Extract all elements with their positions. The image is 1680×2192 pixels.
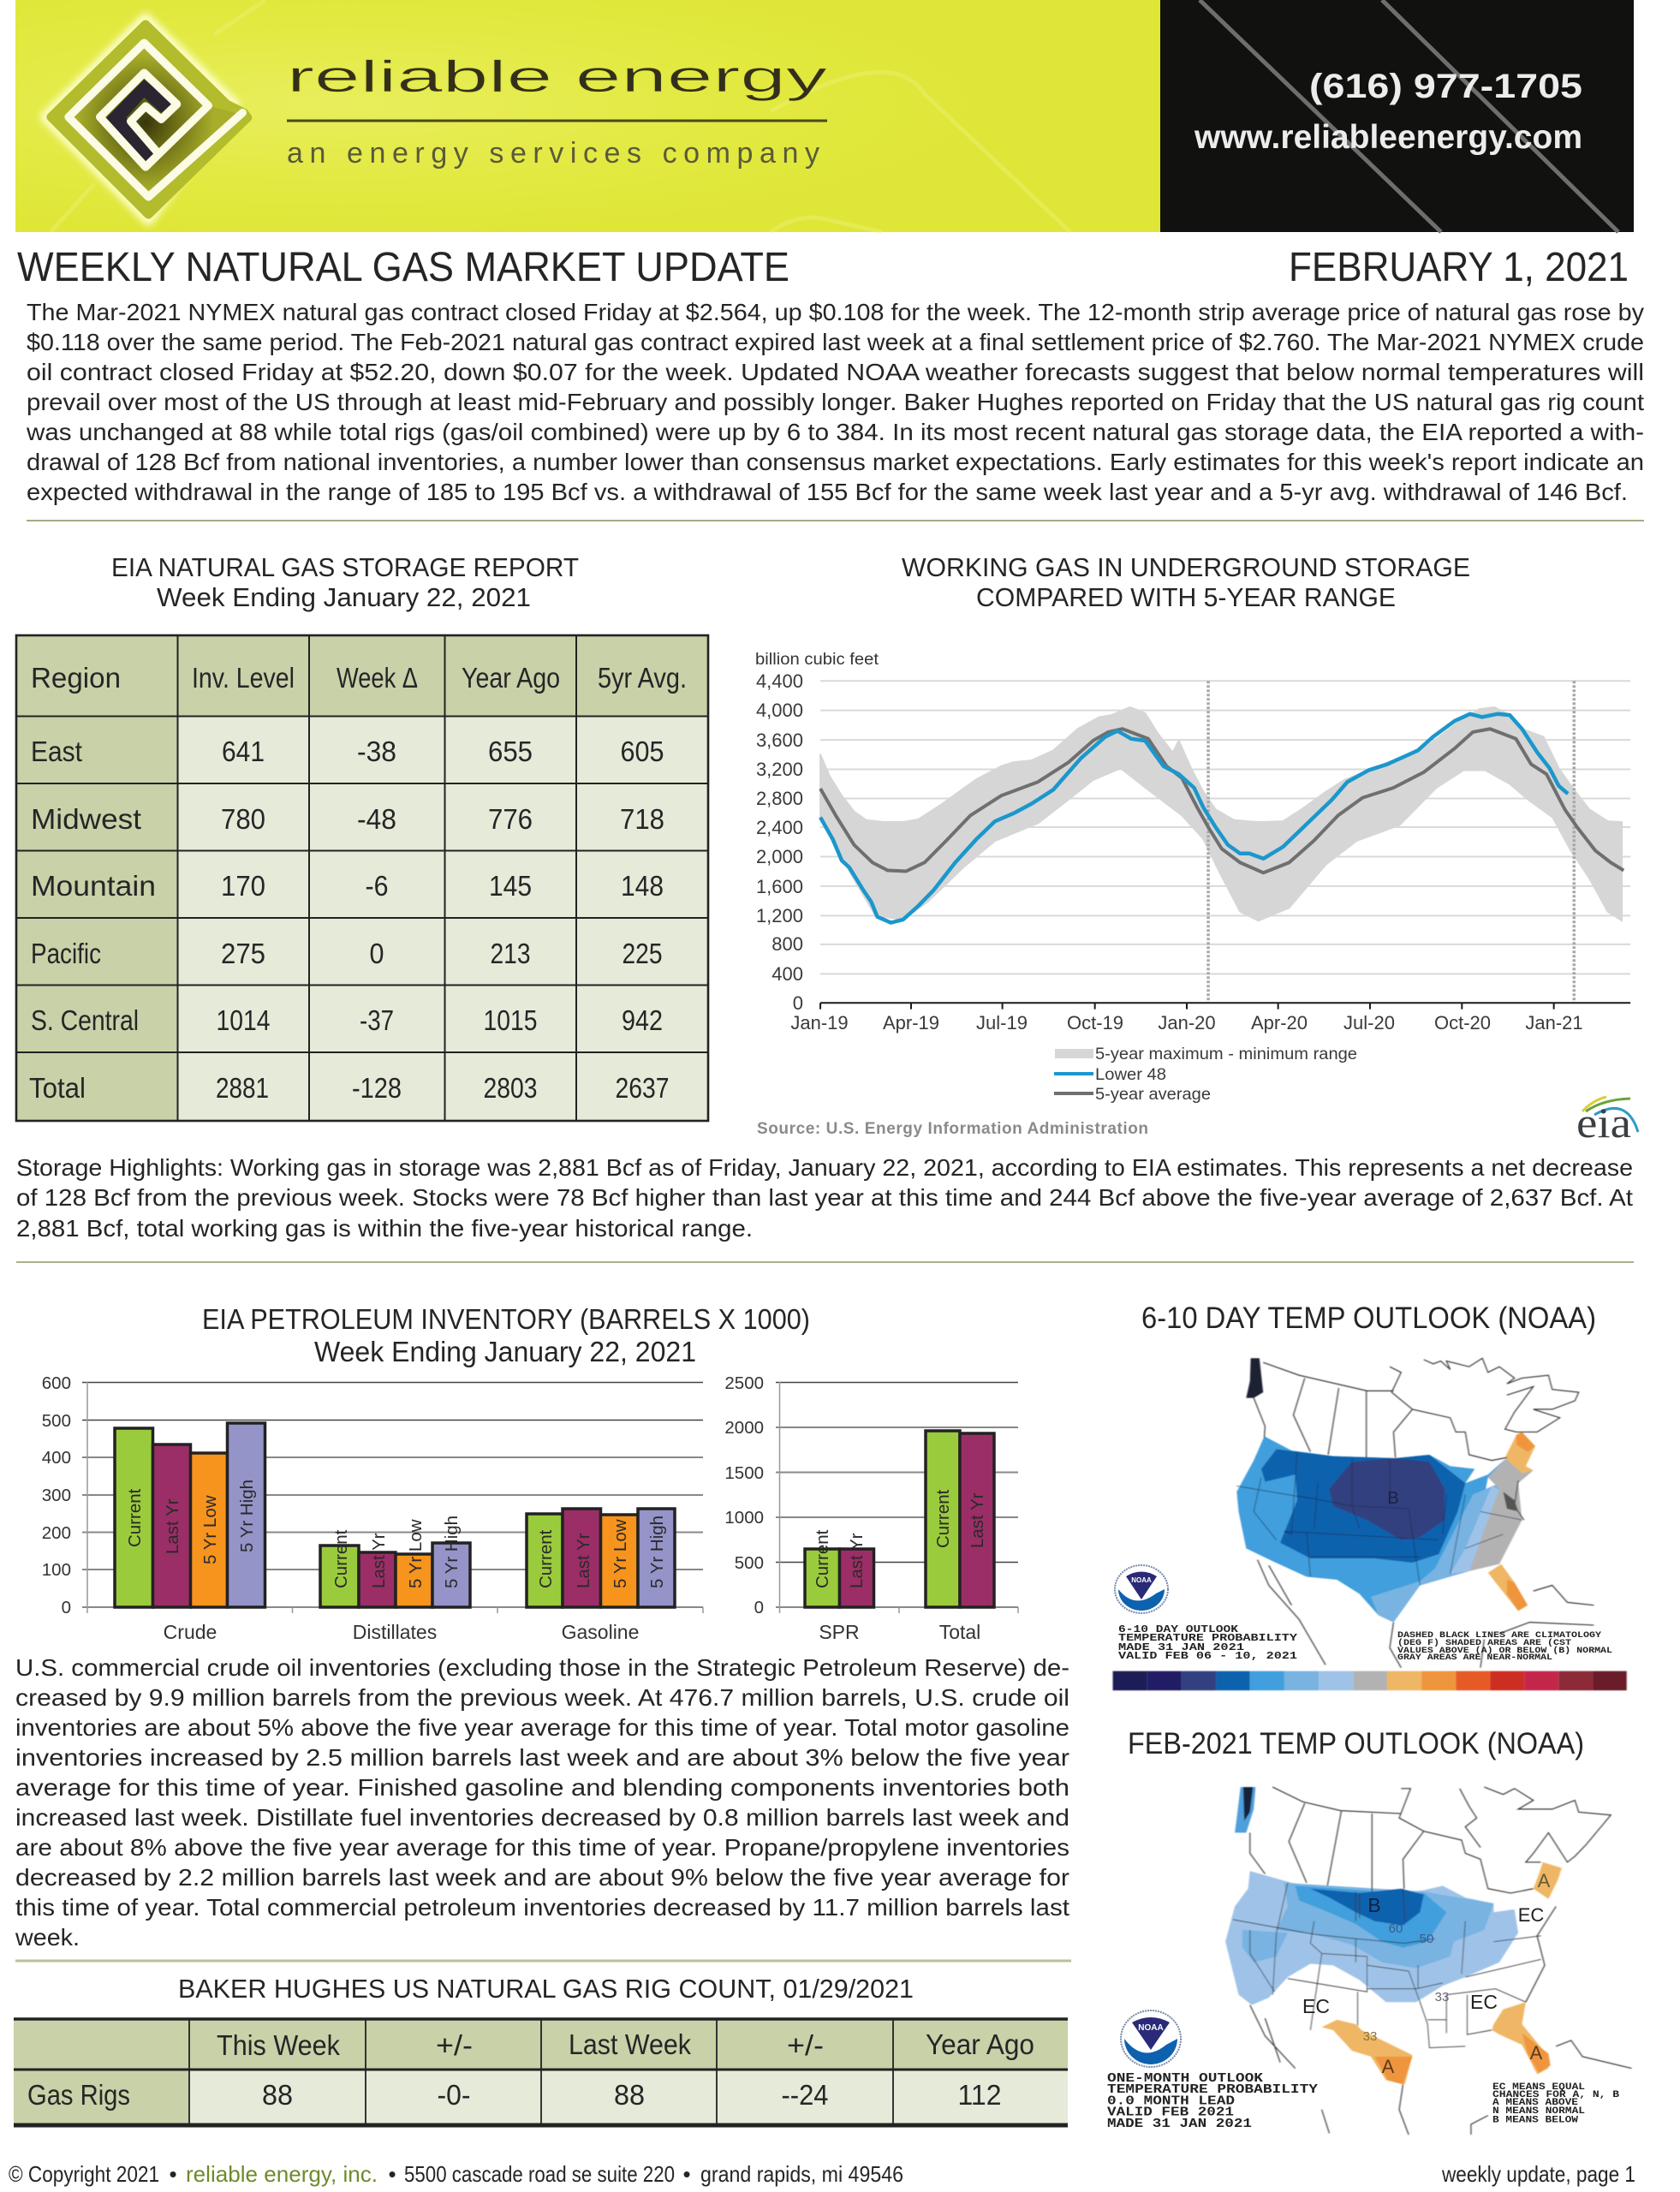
- header row: Last Week: [569, 2028, 691, 2060]
- plotted series: [820, 681, 1630, 1010]
- footer: [9, 2161, 903, 2187]
- 5-year range band: [820, 707, 1622, 920]
- row: Total: 2881: [216, 1072, 269, 1104]
- row: Mountain: -6: [365, 870, 389, 902]
- vertical bar labels: Last Yr: [968, 1492, 987, 1548]
- lime header panel: [15, 0, 1160, 232]
- x axis labels: Jan-21: [1525, 1012, 1583, 1033]
- category labels: [819, 1621, 980, 1643]
- map text: legend notes: B MEANS BELOW: [1492, 2115, 1578, 2125]
- row: Mountain: Mountain: [31, 870, 156, 902]
- x axis labels: Apr-19: [883, 1012, 939, 1033]
- y axis labels: 800: [771, 933, 803, 955]
- y axis labels: 2,400: [756, 817, 803, 838]
- map text: outlook details: MADE 31 JAN 2021: [1107, 2117, 1252, 2131]
- row: East: East: [31, 736, 82, 767]
- heading: 6-10 day outlook: 6-10 DAY TEMP OUTLOOK (NOAA): [1141, 1302, 1596, 1335]
- row: Mountain: 170: [221, 870, 265, 902]
- map text: outlook details: ONE-MONTH OUTLOOK: [1107, 2071, 1263, 2086]
- data row: -0-: [437, 2079, 471, 2111]
- petroleum paragraph: week.: [15, 1924, 80, 1951]
- category labels: Total: [939, 1621, 980, 1643]
- map letters: A: [1382, 2056, 1395, 2077]
- map letters: [1302, 1870, 1551, 2077]
- x axis labels: Jan-19: [790, 1012, 849, 1033]
- x axis labels: Oct-19: [1067, 1012, 1123, 1033]
- row: Total: Total: [29, 1072, 86, 1104]
- header row: +/-: [436, 2029, 473, 2061]
- x axis labels: Jan-20: [1158, 1012, 1216, 1033]
- y axis labels: 300: [42, 1486, 71, 1505]
- y axis labels: 4,400: [756, 670, 803, 692]
- 5-year average line: [820, 729, 1623, 873]
- header banner: [15, 0, 1634, 232]
- row: Pacific: 225: [622, 938, 663, 969]
- table header row: Inv. Level: [192, 662, 295, 694]
- vertical bar labels: Current: [125, 1488, 145, 1547]
- row: East: 655: [488, 736, 533, 767]
- row: Pacific: Pacific: [31, 938, 101, 969]
- map text: outlook details: 6-10 DAY OUTLOOK: [1118, 1623, 1239, 1635]
- row: Pacific: 275: [221, 938, 265, 969]
- category labels: Gasoline: [562, 1621, 639, 1643]
- row: S. Central: 942: [622, 1004, 663, 1036]
- map text: outlook details: VALID FEB 2021: [1107, 2105, 1234, 2120]
- dark blue region: [1261, 1449, 1465, 1563]
- y axis labels: [724, 1373, 764, 1617]
- heading: working gas chart: WORKING GAS IN UNDERGROUND STORAGE: [902, 552, 1470, 582]
- bars: gasoline: [527, 1509, 675, 1607]
- date: FEBRUARY 1, 2021: [1289, 245, 1629, 290]
- table: storage by region: [16, 635, 708, 1121]
- map text: legend notes: EC MEANS EQUAL: [1492, 2082, 1585, 2093]
- y axis labels: 500: [42, 1411, 71, 1431]
- medium blue region: [1277, 1883, 1493, 1969]
- icon: NOAA logo: [1121, 2010, 1181, 2067]
- y axis labels: 2500: [724, 1373, 764, 1393]
- map letters: 60: [1389, 1921, 1403, 1936]
- vertical bar labels: [125, 1480, 667, 1588]
- row: S. Central: S. Central: [31, 1004, 139, 1036]
- petroleum paragraph: U.S. commercial crude oil inventories (excluding those in the Strategic Petroleum Reserve) de-: [15, 1654, 1069, 1681]
- vertical bar labels: Last Yr: [847, 1533, 867, 1588]
- map text: outlook details: TEMPERATURE PROBABILITY: [1107, 2082, 1318, 2097]
- intro paragraph: expected withdrawal in the range of 185 to 195 Bcf vs. a withdrawal of 155 Bcf for the same week last year and a 5-yr avg. withdrawal of 146 Bcf.: [27, 479, 1628, 505]
- x axis labels: Apr-20: [1251, 1012, 1308, 1033]
- icon: eia logo: eia: [1576, 1099, 1631, 1147]
- table: rig count: [14, 2019, 1068, 2125]
- bars: distillates: [320, 1543, 470, 1607]
- footer: •: [388, 2161, 396, 2187]
- storage highlights text: 2,881 Bcf, total working gas is within the five-year historical range.: [16, 1215, 753, 1242]
- table header row: Region: [31, 662, 121, 694]
- row: S. Central: 1014: [216, 1004, 271, 1036]
- state lines: [1233, 1883, 1541, 2048]
- vertical bar labels: [813, 1489, 987, 1588]
- heading: Feb outlook: FEB-2021 TEMP OUTLOOK (NOAA): [1128, 1727, 1584, 1760]
- row: Total: [29, 1072, 670, 1104]
- row: Midwest: 718: [620, 803, 664, 835]
- map letters: 33: [1435, 1990, 1449, 2004]
- orange above-normal areas: [1322, 2020, 1413, 2085]
- axis unit label: billion cubic feet: [755, 651, 879, 669]
- category labels: [164, 1621, 639, 1643]
- y axis labels: 4,000: [756, 700, 803, 721]
- black contact panel: [1160, 0, 1634, 232]
- company name: reliable energy: [287, 52, 827, 102]
- row: S. Central: -37: [360, 1004, 394, 1036]
- row: Mountain: 148: [621, 870, 664, 902]
- y axis labels: 2000: [724, 1418, 764, 1438]
- table header row: [31, 662, 687, 694]
- light blue base region: [1225, 1871, 1518, 2005]
- intro paragraph: oil contract closed Friday at $52.20, down $0.07 for the week. Updated NOAA weather forecasts suggest that below normal temperatures will: [27, 359, 1644, 385]
- stronger blue region: [1296, 1885, 1446, 1948]
- petroleum paragraph: increased last week. Distillate fuel inventories decreased by 0.8 million barrels last week and: [15, 1804, 1069, 1831]
- heading: rig count: BAKER HUGHES US NATURAL GAS RIG COUNT, 01/29/2021: [178, 1974, 914, 2004]
- page number: weekly update, page 1: [1441, 2161, 1635, 2187]
- vertical bar labels: Last Yr: [163, 1498, 182, 1554]
- temperature scale strip: [1113, 1671, 1627, 1690]
- vertical bar labels: Current: [331, 1529, 351, 1588]
- map text: legend notes: A MEANS ABOVE: [1492, 2098, 1578, 2108]
- gray near-normal region: [1469, 1457, 1534, 1571]
- bar chart: SPR and total: [724, 1373, 1018, 1643]
- row: Pacific: 0: [370, 938, 384, 969]
- footer: 5500 cascade road se suite 220: [404, 2161, 675, 2187]
- heading: storage report: Week Ending January 22, 2021: [157, 582, 531, 612]
- y axis labels: 100: [42, 1560, 71, 1580]
- vertical bar labels: 5 Yr Low: [200, 1495, 220, 1564]
- y axis labels: 1,600: [756, 876, 803, 897]
- row: Pacific: 213: [490, 938, 531, 969]
- y axis labels: 2,800: [756, 788, 803, 809]
- black spiral core: [105, 80, 173, 163]
- y axis labels: 0: [754, 1598, 764, 1617]
- intro paragraph: was unchanged at 88 while total rigs (gas/oil combined) were up by 6 to 384. In its most recent natural gas storage data, the EIA reported a with-: [26, 419, 1644, 445]
- petroleum paragraph: inventories are about 5% above the five year average for this time of year. Total motor gasoline: [15, 1714, 1069, 1741]
- vertical bar labels: Last Yr: [369, 1533, 389, 1588]
- vertical bar labels: 5 Yr Low: [406, 1519, 426, 1588]
- data row: 88: [614, 2079, 645, 2111]
- y axis labels: 500: [735, 1553, 764, 1573]
- vertical bar labels: Last Yr: [574, 1533, 593, 1588]
- row: East: 605: [620, 736, 664, 767]
- vertical bar labels: 5 Yr High: [647, 1516, 667, 1588]
- bar chart: crude, distillates, gasoline: [42, 1373, 703, 1643]
- footer: •: [169, 2161, 177, 2187]
- map text: legend notes: VALUES ABOVE (A) OR BELOW (B) NORMAL: [1397, 1646, 1612, 1656]
- y axis labels: 600: [42, 1373, 71, 1393]
- icon: NOAA logo: NOAA: [1138, 2023, 1164, 2033]
- row: East: [31, 736, 664, 767]
- footer: •: [682, 2161, 691, 2187]
- footer: grand rapids, mi 49546: [700, 2161, 903, 2187]
- map text: legend notes: [1492, 2082, 1619, 2125]
- y axis labels: [756, 670, 803, 1014]
- vertical bar labels: 5 Yr High: [237, 1480, 257, 1552]
- legend: Lower 48: [1095, 1066, 1166, 1084]
- data row: 112: [957, 2079, 1002, 2111]
- heading: petroleum inventory: [202, 1303, 810, 1367]
- vertical bar labels: 5 Yr High: [442, 1516, 462, 1588]
- petroleum paragraph: creased by 9.9 million barrels from the previous week. At 476.7 million barrels, U.S. crude oil: [15, 1684, 1069, 1711]
- header row: +/-: [787, 2029, 824, 2061]
- vertical bar labels: Current: [813, 1529, 832, 1588]
- map text: legend notes: [1397, 1631, 1612, 1663]
- map text: outlook details: [1107, 2071, 1318, 2131]
- table header row: Week Δ: [337, 662, 418, 694]
- legend: 5-year maximum - minimum range: [1095, 1045, 1357, 1063]
- row: Midwest: 780: [221, 803, 265, 835]
- y axis labels: 400: [771, 963, 803, 985]
- map letters: EC: [1470, 1991, 1498, 2013]
- tagline: an energy services company: [287, 137, 819, 170]
- map letters: A: [1538, 1870, 1551, 1891]
- footer: reliable energy, inc.: [186, 2161, 378, 2187]
- vertical bar labels: Current: [536, 1529, 556, 1588]
- map text: outlook details: VALID FEB 06 - 10, 2021: [1118, 1650, 1297, 1662]
- map text: legend notes: (DEG F) SHADED AREAS ARE (CST: [1397, 1638, 1571, 1648]
- y axis labels: 3,200: [756, 759, 803, 780]
- y axis labels: 1500: [724, 1463, 764, 1483]
- heading: petroleum inventory: Week Ending January 22, 2021: [314, 1336, 696, 1367]
- storage highlights text: Storage Highlights: Working gas in storage was 2,881 Bcf as of Friday, January 22, 2021, according to EIA estimates. This represents a net decrease: [16, 1154, 1633, 1181]
- Lower 48 line: [820, 714, 1568, 923]
- map letters: EC: [1518, 1904, 1544, 1926]
- intro paragraph: drawal of 128 Bcf from national inventories, a number lower than consensus market expectations. Early estimates for this week's report indicate an: [27, 449, 1644, 475]
- map text: legend notes: DASHED BLACK LINES ARE CLIMATOLOGY: [1397, 1631, 1601, 1641]
- y axis labels: 400: [42, 1448, 71, 1468]
- dark blue core: [1310, 1889, 1424, 1926]
- row: S. Central: 1015: [483, 1004, 538, 1036]
- data row: 88: [262, 2079, 293, 2111]
- map letters: 33: [1363, 2029, 1377, 2044]
- map text: outlook details: [1118, 1623, 1298, 1662]
- y axis labels: 2,000: [756, 846, 803, 867]
- navy core: [1329, 1458, 1445, 1540]
- map text: outlook details: TEMPERATURE PROBABILITY: [1118, 1632, 1298, 1644]
- legend: 5-year average: [1095, 1086, 1211, 1104]
- category labels: SPR: [819, 1621, 860, 1643]
- table header row: Year Ago: [462, 662, 560, 694]
- petroleum paragraph: inventories increased by 2.5 million barrels last week and are about 3% below the five year: [15, 1744, 1069, 1771]
- map: February temperature outlook: [1107, 1787, 1631, 2135]
- map letters: 50: [1420, 1932, 1433, 1946]
- intro paragraph: prevail over most of the US through at least mid-February and possibly longer. Baker Hughes reported on Friday that the US natural gas rig count: [27, 389, 1644, 415]
- vertical bar labels: 5 Yr Low: [611, 1519, 630, 1588]
- map letters: B: [1367, 1894, 1381, 1916]
- legend: [1054, 1045, 1357, 1104]
- website: www.reliableenergy.com: [1194, 119, 1582, 156]
- row: Midwest: 776: [488, 803, 533, 835]
- icon: NOAA logo: NOAA: [1131, 1576, 1152, 1584]
- map letters: EC: [1302, 1995, 1330, 2017]
- petroleum paragraph: average for this time of year. Finished gasoline and blending components inventories both: [15, 1774, 1069, 1801]
- row: Mountain: 145: [489, 870, 532, 902]
- y axis labels: [42, 1373, 71, 1617]
- bars: crude: [115, 1423, 265, 1607]
- row: Midwest: -48: [357, 803, 396, 835]
- intro paragraph: $0.118 over the same period. The Feb-2021 natural gas contract expired last week at a final settlement price of $2.760. The Mar-2021 NYMEX crude: [27, 329, 1644, 355]
- row: Total: 2637: [615, 1072, 670, 1104]
- table header row: 5yr Avg.: [598, 662, 687, 694]
- heading: working gas chart: [902, 552, 1470, 612]
- storage highlights text: [16, 1154, 1633, 1242]
- map text: outlook details: MADE 31 JAN 2021: [1118, 1641, 1244, 1653]
- map text: legend notes: CHANCES FOR A, N, B: [1492, 2090, 1619, 2100]
- intro paragraph: [26, 299, 1644, 505]
- row: Midwest: Midwest: [31, 803, 141, 835]
- heading: working gas chart: COMPARED WITH 5-YEAR RANGE: [976, 582, 1396, 612]
- phone: (616) 977-1705: [1309, 68, 1582, 105]
- line chart: working gas vs 5-year range: [755, 651, 1638, 1147]
- petroleum paragraph: this time of year. Total commercial petroleum inventories decreased by 11.7 million barrels last: [15, 1894, 1069, 1921]
- map letters: A: [1530, 2042, 1543, 2064]
- white spiral line: [69, 43, 242, 197]
- data row: [27, 2079, 1002, 2111]
- row: S. Central: [31, 1004, 663, 1036]
- Canada, Mexico and island outlines: [1254, 1358, 1594, 1668]
- header row: [217, 2028, 1034, 2061]
- bars: total: [926, 1431, 994, 1607]
- category labels: Distillates: [353, 1621, 437, 1643]
- map: 6-10 day temperature outlook: [1113, 1358, 1627, 1690]
- Canada, Mexico and island outlines: [1250, 1787, 1631, 2135]
- y axis labels: 0: [793, 992, 803, 1014]
- data row: Gas Rigs: [27, 2079, 130, 2111]
- petroleum paragraph: decreased by 2.2 million barrels last week and are about 9% below the five year average for: [15, 1864, 1069, 1891]
- bars: SPR: [805, 1549, 873, 1607]
- row: Total: -128: [352, 1072, 402, 1104]
- y axis labels: 0: [62, 1598, 71, 1617]
- petroleum paragraph: are about 8% above the five year average for this time of year. Propane/propylene inventories: [15, 1834, 1069, 1861]
- source note: Source: U.S. Energy Information Administration: [757, 1120, 1148, 1138]
- row: East: 641: [222, 736, 265, 767]
- y axis labels: 1,200: [756, 905, 803, 926]
- x axis labels: [790, 1012, 1583, 1033]
- petroleum paragraph: [15, 1654, 1069, 1951]
- heading: storage report: [111, 552, 579, 612]
- icon: NOAA logo: [1115, 1565, 1168, 1613]
- vertical bar labels: Current: [933, 1489, 953, 1548]
- row: Mountain: [31, 870, 664, 902]
- intro paragraph: The Mar-2021 NYMEX natural gas contract closed Friday at $2.564, up $0.108 for the week. The 12-month strip average price of natural gas rose by: [27, 299, 1644, 325]
- header row: This Week: [217, 2029, 340, 2061]
- main title: WEEKLY NATURAL GAS MARKET UPDATE: [17, 245, 789, 290]
- y axis labels: 3,600: [756, 730, 803, 751]
- y axis labels: 1000: [724, 1508, 764, 1528]
- light blue base region: [1236, 1436, 1507, 1623]
- heading: petroleum inventory: EIA PETROLEUM INVENTORY (BARRELS X 1000): [202, 1303, 810, 1335]
- header row: Year Ago: [926, 2028, 1034, 2060]
- map text: outlook details: 0.0 MONTH LEAD: [1107, 2094, 1235, 2108]
- row: Pacific: [31, 938, 663, 969]
- y axis labels: 200: [42, 1523, 71, 1543]
- footer: © Copyright 2021: [9, 2161, 159, 2187]
- map text: legend notes: N MEANS NORMAL: [1492, 2106, 1585, 2117]
- category labels: Crude: [164, 1621, 217, 1643]
- storage highlights text: of 128 Bcf from the previous week. Stocks were 78 Bcf higher than last year at this time and 244 Bcf above the five-year average of 2,637 Bcf. At: [16, 1184, 1633, 1211]
- row: Midwest: [31, 803, 664, 835]
- heading: storage report: EIA NATURAL GAS STORAGE REPORT: [111, 552, 579, 582]
- map text: legend notes: GRAY AREAS ARE NEAR-NORMAL: [1397, 1653, 1552, 1663]
- lighter blue band: [1371, 1483, 1503, 1623]
- data row: --24: [781, 2079, 829, 2111]
- row: Total: 2803: [483, 1072, 538, 1104]
- state lines: [1236, 1452, 1522, 1585]
- x axis labels: Jul-20: [1343, 1012, 1395, 1033]
- x axis labels: Oct-20: [1434, 1012, 1491, 1033]
- x axis labels: Jul-19: [976, 1012, 1028, 1033]
- orange above-normal areas: [1505, 1432, 1535, 1474]
- row: East: -38: [357, 736, 396, 767]
- map letter B: B: [1387, 1489, 1399, 1508]
- logo: diamond spiral: [45, 19, 247, 220]
